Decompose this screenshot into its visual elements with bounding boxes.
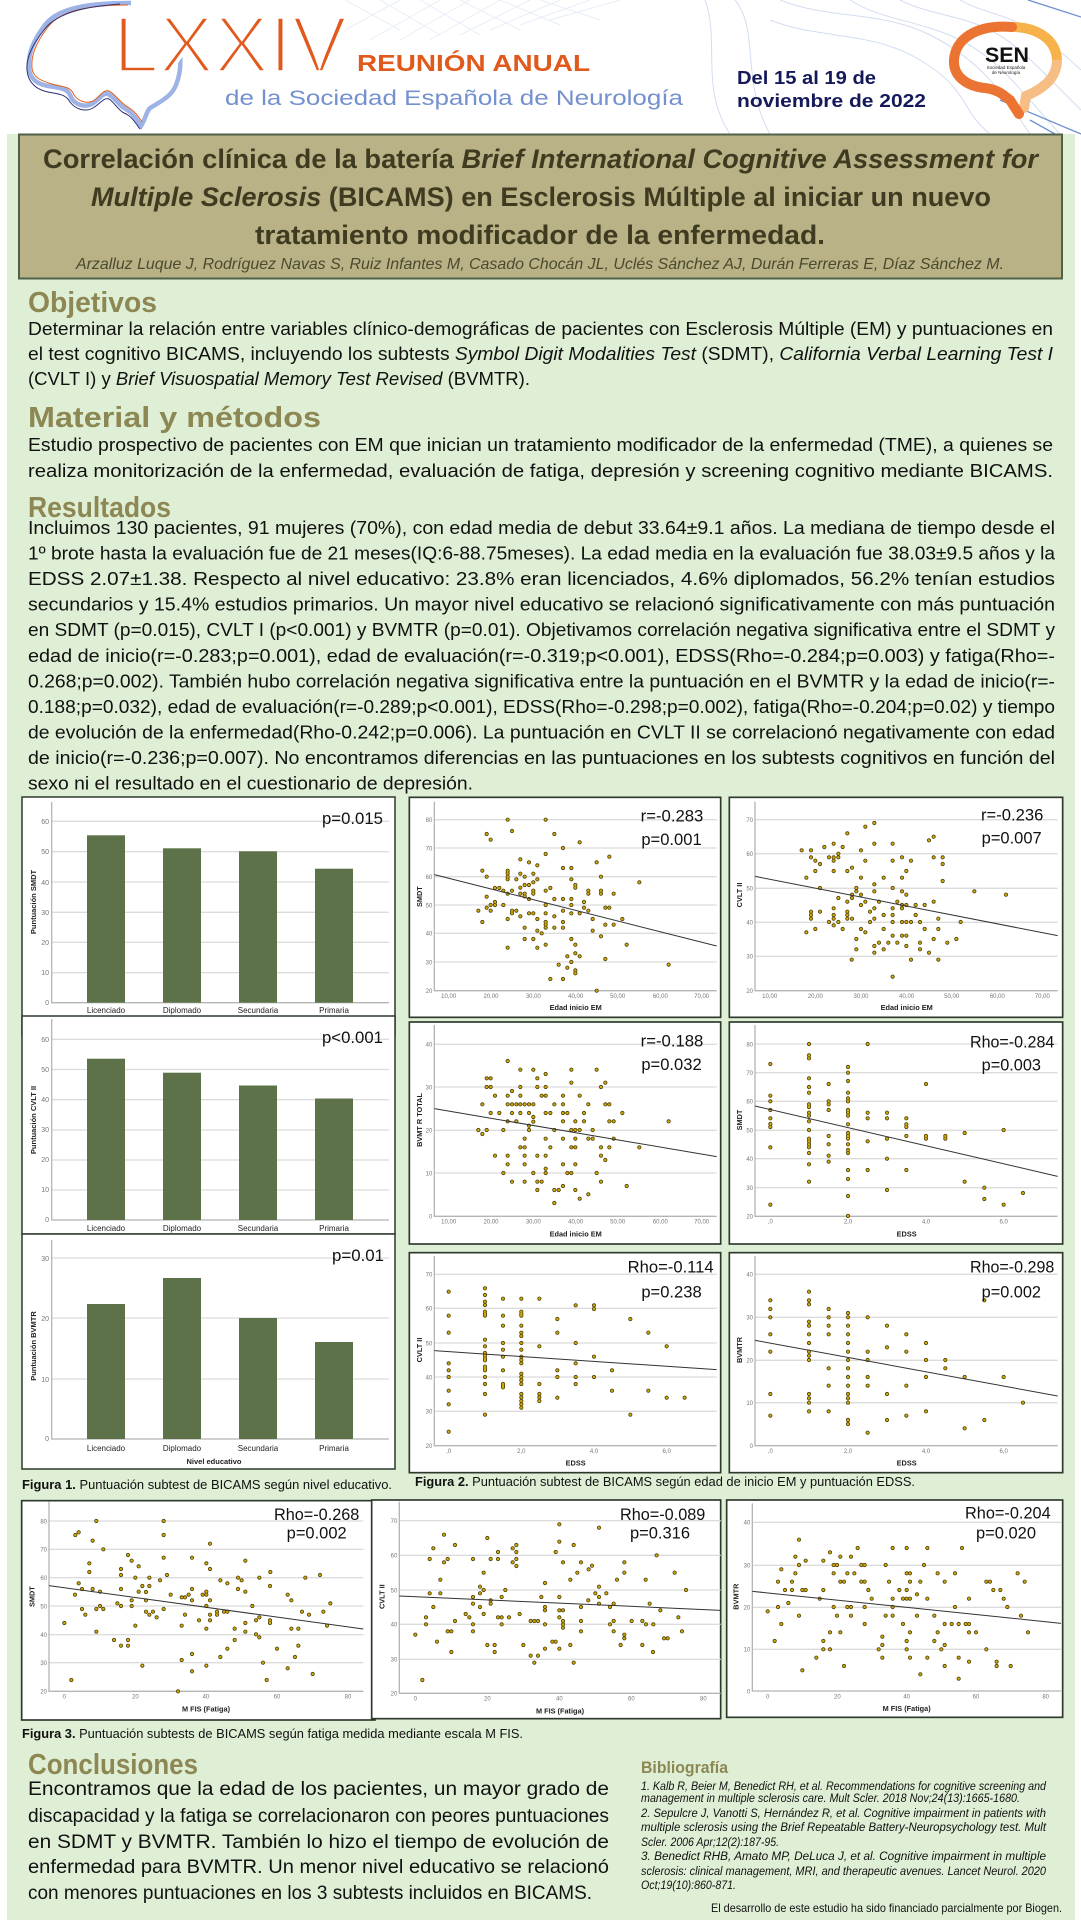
scatter: CVLT II vs EDSS: 70	[426, 1273, 433, 1279]
bar chart: BVMTR by education: Puntuación BVMTR	[29, 1311, 38, 1381]
scatter: CVLT II vs EDSS: 40	[426, 1375, 433, 1381]
scatter: BVMT R total vs age at onset: 0	[429, 1215, 433, 1221]
bar chart: SMDT by education: 30	[41, 910, 49, 917]
scatter: SMDT vs fatigue: 60	[274, 1695, 281, 1701]
bar chart: CVLT II by education: 30	[41, 1127, 49, 1134]
scatter: CVLT II vs age at onset: 50,00	[944, 994, 960, 1000]
scatter: CVLT II vs fatigue: 60	[628, 1697, 635, 1703]
scatter: BVMTR vs fatigue: M FIS (Fatiga)	[883, 1704, 931, 1713]
scatter: SMDT vs fatigue: 80	[345, 1695, 352, 1701]
scatter: CVLT II vs fatigue: 20	[484, 1697, 491, 1703]
scatter: CVLT II vs age at onset: p=0.007	[982, 828, 1042, 847]
scatter: SMDT vs fatigue: 50	[40, 1604, 48, 1610]
bar chart: BVMTR by education: Primaria	[319, 1444, 349, 1453]
bar chart: SMDT by education: 50	[41, 849, 49, 856]
scatter: SMDT vs age at onset: 50,00	[610, 994, 626, 1000]
scatter: CVLT II vs age at onset: 20,00	[808, 994, 823, 1000]
caption: figura 3: Figura 3. Puntuación subtests de BICAMS según fatiga medida mediante escala M FIS.	[22, 1726, 523, 1741]
scatter: CVLT II vs fatigue: p=0.316	[630, 1523, 690, 1542]
scatter: BVMTR vs EDSS: 4,0	[922, 1449, 931, 1455]
event dates: noviembre de 2022	[737, 91, 926, 111]
scatter: CVLT II vs age at onset: Edad inicio EM	[881, 1003, 933, 1012]
icon: SEN logo: de Neurología	[992, 70, 1021, 75]
section: resultados: Resultados	[28, 492, 171, 524]
scatter: CVLT II vs EDSS: EDSS	[566, 1459, 586, 1468]
scatter: SMDT vs age at onset: 20,00	[484, 994, 499, 1000]
scatter: SMDT vs fatigue: 70	[40, 1548, 48, 1554]
scatter: BVMTR vs fatigue: Rho=-0.204	[965, 1503, 1051, 1522]
section: resultados: Incluimos 130 pacientes, 91 mujeres (70%), con edad media de debut 33.64±9.1 años. La mediana de tiempo desde el	[28, 517, 1055, 538]
scatter: BVMTR vs fatigue: 20	[744, 1606, 751, 1612]
scatter: BVMTR vs EDSS: p=0.002	[982, 1282, 1041, 1301]
bar chart: SMDT by education: 0	[45, 1000, 49, 1007]
section: conclusiones: en SDMT y BVMTR. También lo hizo el tiempo de evolución de	[28, 1831, 609, 1853]
scatter: CVLT II vs EDSS: 20	[426, 1444, 433, 1450]
bar chart: SMDT by education: Diplomado	[163, 1006, 202, 1015]
scatter: SMDT vs age at onset: 70,00	[694, 994, 710, 1000]
scatter: SMDT vs age at onset: 30,00	[526, 994, 541, 1000]
bar chart: CVLT II by education	[22, 1016, 395, 1234]
section: objetivos: Objetivos	[28, 287, 157, 319]
bar chart: BVMTR by education: Licenciado	[87, 1444, 126, 1453]
bar chart: SMDT by education: 10	[41, 970, 49, 977]
section: conclusiones: Conclusiones	[28, 1749, 198, 1781]
title box: Arzalluz Luque J, Rodríguez Navas S, Ruiz Infantes M, Casado Chocán JL, Uclés Sánchez AJ, Durán Ferreras E, Díaz Sánchez M.	[75, 256, 1004, 273]
bar chart: CVLT II by education: 10	[41, 1187, 49, 1194]
scatter: SMDT vs age at onset: p=0.001	[641, 830, 702, 849]
scatter: CVLT II vs age at onset: 70,00	[1035, 994, 1050, 1000]
bar chart: BVMTR by education: Nivel educativo	[186, 1457, 242, 1466]
scatter: CVLT II vs age at onset: 60,00	[990, 994, 1005, 1000]
scatter: CVLT II vs age at onset: 20	[746, 989, 754, 995]
scatter: CVLT II vs EDSS: p=0.238	[641, 1282, 702, 1301]
scatter: CVLT II vs age at onset: 30	[746, 955, 754, 961]
scatter: BVMTR vs EDSS: 10	[746, 1401, 754, 1407]
scatter: SMDT vs EDSS: 4,0	[922, 1220, 931, 1226]
scatter: SMDT vs EDSS: ,0	[768, 1220, 773, 1226]
scatter: BVMT R total vs age at onset: r=-0.188	[641, 1032, 703, 1051]
section: resultados: edad de inicio(r=-0.283;p=0.001), edad de evaluación(r=-0.319;p<0.001), EDSS(Rho=-0.284;p=0.003) y fatiga(Rho=-	[28, 645, 1055, 666]
bar chart: CVLT II by education: 60	[41, 1037, 49, 1044]
scatter: CVLT II vs EDSS: 2,0	[517, 1449, 526, 1455]
bar chart: BVMTR by education: 20	[41, 1316, 49, 1323]
bar chart: CVLT II by education: Secundaria	[238, 1224, 279, 1233]
scatter: CVLT II vs EDSS: 50	[426, 1341, 433, 1347]
scatter: SMDT vs fatigue: 20	[40, 1690, 48, 1696]
scatter: CVLT II vs EDSS: 6,0	[662, 1449, 671, 1455]
bar chart: SMDT by education: 60	[41, 819, 49, 826]
section: resultados: en SDMT (p=0.015), CVLT I (p<0.001) y BVMTR (p=0.01). Objetivamos correlación negativa significativa entre el SDMT y	[28, 619, 1056, 640]
section: resultados: de inicio(r=-0.236;p=0.007). No encontramos diferencias en las puntuaciones en los subtests cognitivos en función del	[28, 747, 1055, 768]
scatter: BVMTR vs EDSS	[729, 1253, 1063, 1473]
section: bibliografía: multiple sclerosis using the Brief Repeatable Battery-Neuropsychology test. Mult	[641, 1822, 1047, 1834]
scatter: SMDT vs EDSS: 60	[746, 1100, 754, 1106]
scatter: SMDT vs age at onset: 10,00	[441, 994, 457, 1000]
title box	[19, 134, 1062, 278]
section: objetivos: el test cognitivo BICAMS, incluyendo los subtests Symbol Digit Modalities Test (SDMT), California Verbal Learning Test I	[28, 343, 1053, 364]
icon: SEN logo: Sociedad Española	[987, 65, 1026, 70]
icon: SEN logo	[954, 27, 1057, 114]
bar chart: BVMTR by education: 0	[45, 1436, 49, 1443]
bar chart: BVMTR by education: 30	[41, 1256, 49, 1263]
section: material y métodos: realiza monitorización de la enfermedad, evaluación de fatiga, depresión y screening cognitivo mediante BICAMS.	[28, 460, 1053, 481]
scatter: BVMTR vs fatigue: 60	[973, 1694, 980, 1700]
bar chart: BVMTR by education: p=0.01	[332, 1246, 384, 1265]
bar chart: SMDT by education: Licenciado	[87, 1006, 126, 1015]
bar chart: CVLT II by education: 40	[41, 1097, 49, 1104]
scatter: CVLT II vs fatigue: 0	[414, 1697, 418, 1703]
scatter: BVMTR vs EDSS: 0	[750, 1444, 754, 1450]
scatter: CVLT II vs age at onset: 40	[746, 921, 754, 927]
section: objetivos: Determinar la relación entre variables clínico-demográficas de pacientes con Esclerosis Múltiple (EM) y puntuaciones en	[28, 318, 1053, 339]
scatter: CVLT II vs age at onset: 10,00	[762, 994, 778, 1000]
scatter: BVMT R total vs age at onset: Edad inicio EM	[550, 1230, 602, 1239]
scatter: CVLT II vs age at onset	[729, 797, 1063, 1017]
scatter: BVMTR vs fatigue: 80	[1042, 1694, 1050, 1700]
scatter: BVMTR vs EDSS: ,0	[768, 1449, 773, 1455]
scatter: SMDT vs EDSS: Rho=-0.284	[970, 1032, 1054, 1051]
scatter: SMDT vs fatigue: 20	[132, 1695, 139, 1701]
section: conclusiones: Encontramos que la edad de los pacientes, un mayor grado de	[28, 1778, 609, 1800]
event title: REUNIÓN ANUAL	[357, 49, 590, 76]
scatter: BVMTR vs fatigue: BVMTR	[732, 1583, 741, 1610]
section: conclusiones: con menores puntuaciones en los 3 subtests incluidos en BICAMS.	[28, 1882, 592, 1904]
section: bibliografía: Oct;19(10):860-871.	[641, 1880, 736, 1892]
section: resultados: EDSS 2.07±1.38. Respecto al nivel educativo: 23.8% eran licenciados, 4.6% diplomados, 56.2% tenían estudios	[28, 568, 1055, 589]
scatter: CVLT II vs fatigue: 40	[556, 1697, 563, 1703]
scatter: CVLT II vs fatigue: M FIS (Fatiga)	[536, 1707, 585, 1716]
title box: Correlación clínica de la batería Brief International Cognitive Assessment for	[43, 144, 1039, 174]
scatter: SMDT vs fatigue	[22, 1501, 375, 1720]
scatter: SMDT vs fatigue: p=0.002	[287, 1523, 347, 1542]
scatter: BVMT R total vs age at onset: 10	[426, 1171, 433, 1177]
bar chart: BVMTR by education: Diplomado	[163, 1444, 202, 1453]
section: resultados: de evolución de la enfermedad(Rho-0.242;p=0.006). La puntuación en CVLT II se correlacionó negativamente con edad	[28, 721, 1055, 742]
section: bibliografía: 1. Kalb R, Beier M, Benedict RH, et al. Recommendations for cognitive screening and	[641, 1781, 1047, 1793]
section: material y métodos: Estudio prospectivo de pacientes con EM que inician un tratamiento modificador de la enfermedad (TME), a quienes se	[28, 434, 1053, 455]
bar chart: CVLT II by education: 20	[41, 1157, 49, 1164]
caption: figura 1: Figura 1. Puntuación subtest de BICAMS según nivel educativo.	[22, 1477, 392, 1492]
section: bibliografía: 3. Benedict RHB, Amato MP, DeLuca J, et al. Cognitive impairment in multiple	[641, 1851, 1046, 1863]
scatter: BVMT R total vs age at onset: p=0.032	[641, 1055, 702, 1074]
scatter: BVMT R total vs age at onset: 30	[426, 1085, 433, 1091]
bar chart: SMDT by education: p=0.015	[322, 809, 383, 828]
scatter: CVLT II vs fatigue	[372, 1500, 721, 1719]
scatter: CVLT II vs EDSS: CVLT II	[415, 1338, 424, 1362]
scatter: BVMT R total vs age at onset: 20,00	[484, 1220, 499, 1226]
scatter: CVLT II vs EDSS: 60	[426, 1307, 433, 1313]
scatter: CVLT II vs age at onset: 50	[746, 887, 754, 893]
scatter: BVMT R total vs age at onset: 50,00	[610, 1220, 626, 1226]
section: resultados: sexo ni el resultado en el cuestionario de depresión.	[28, 772, 473, 794]
scatter: SMDT vs EDSS: 40	[746, 1157, 754, 1163]
section: conclusiones: enfermedad para BVMTR. Un menor nivel educativo se relacionó	[28, 1856, 609, 1878]
scatter: BVMT R total vs age at onset: 40	[426, 1043, 433, 1049]
title box: Multiple Sclerosis (BICAMS) en Esclerosis Múltiple al iniciar un nuevo	[91, 182, 991, 212]
scatter: BVMTR vs EDSS: BVMTR	[735, 1336, 744, 1363]
section: conclusiones	[28, 1749, 609, 1904]
scatter: SMDT vs age at onset: 40	[426, 932, 433, 938]
scatter: CVLT II vs EDSS: 30	[426, 1410, 433, 1416]
scatter: SMDT vs EDSS: SMDT	[735, 1109, 744, 1130]
bar chart: CVLT II by education: 50	[41, 1067, 49, 1074]
scatter: BVMT R total vs age at onset: 10,00	[441, 1220, 457, 1226]
bar chart: SMDT by education: 20	[41, 940, 49, 947]
scatter: SMDT vs EDSS: EDSS	[897, 1230, 917, 1239]
scatter: BVMTR vs fatigue: 20	[834, 1694, 841, 1700]
scatter: SMDT vs EDSS	[729, 1022, 1063, 1244]
scatter: CVLT II vs fatigue: 70	[391, 1519, 398, 1525]
event number: LXXIV	[113, 0, 348, 89]
section: resultados: 0.188;p=0.032), edad de evaluación(r=-0.289;p<0.001), EDSS(Rho=-0.298;p=0.002), fatiga(Rho=-0.204;p=0.02) y tiempo	[28, 696, 1055, 717]
scatter: SMDT vs EDSS: 30	[746, 1186, 754, 1192]
scatter: BVMTR vs fatigue: 30	[744, 1564, 751, 1570]
scatter: BVMT R total vs age at onset: 30,00	[526, 1220, 541, 1226]
bar chart: SMDT by education: 40	[41, 880, 49, 887]
scatter: BVMTR vs EDSS: 30	[746, 1316, 754, 1322]
scatter: CVLT II vs fatigue: 80	[700, 1697, 707, 1703]
scatter: BVMTR vs fatigue: 40	[903, 1694, 911, 1700]
scatter: BVMTR vs fatigue: 40	[744, 1521, 751, 1527]
icon: brain outline	[27, 3, 180, 129]
section: resultados	[28, 492, 1056, 794]
icon: SEN logo: SEN	[985, 44, 1029, 67]
scatter: SMDT vs age at onset: 50	[426, 903, 433, 909]
bar chart: CVLT II by education: Puntuación CVLT II	[29, 1086, 38, 1154]
scatter: CVLT II vs EDSS: 4,0	[590, 1449, 599, 1455]
scatter: SMDT vs EDSS: 80	[746, 1042, 754, 1048]
scatter: SMDT vs EDSS: 50	[746, 1129, 754, 1135]
bar chart: CVLT II by education: Licenciado	[87, 1224, 126, 1233]
scatter: BVMTR vs fatigue: 0	[747, 1689, 751, 1695]
society name: de la Sociedad Española de Neurología	[225, 87, 683, 110]
scatter: CVLT II vs fatigue: Rho=-0.089	[620, 1505, 705, 1524]
scatter: BVMTR vs fatigue	[727, 1500, 1063, 1717]
bar chart: SMDT by education: Puntuación SMDT	[29, 870, 38, 934]
scatter: SMDT vs age at onset: 80	[426, 818, 433, 824]
scatter: BVMT R total vs age at onset: 60,00	[653, 1220, 668, 1226]
scatter: BVMTR vs EDSS: 40	[746, 1273, 754, 1279]
scatter: BVMT R total vs age at onset: 20	[426, 1129, 433, 1135]
scatter: SMDT vs age at onset: r=-0.283	[641, 807, 703, 826]
scatter: CVLT II vs age at onset: 60	[746, 852, 754, 858]
scatter: SMDT vs fatigue: Rho=-0.268	[274, 1505, 359, 1524]
scatter: CVLT II vs fatigue: CVLT II	[378, 1584, 387, 1609]
scatter: SMDT vs fatigue: 40	[40, 1633, 48, 1639]
bar chart: CVLT II by education: Diplomado	[163, 1224, 202, 1233]
header banner	[0, 0, 1081, 134]
section: material y métodos	[28, 402, 1053, 481]
scatter: SMDT vs age at onset: 60,00	[653, 994, 668, 1000]
title box: tratamiento modificador de la enfermedad.	[255, 220, 825, 250]
scatter: SMDT vs fatigue: 0	[63, 1695, 67, 1701]
scatter: SMDT vs EDSS: 20	[746, 1215, 754, 1221]
section: bibliografía	[640, 1758, 1047, 1892]
scatter: BVMTR vs EDSS: Rho=-0.298	[970, 1257, 1054, 1276]
bar chart: CVLT II by education: p<0.001	[322, 1028, 383, 1047]
section: bibliografía: 2. Sepulcre J, Vanotti S, Hernández R, et al. Cognitive impairment in patients with	[640, 1808, 1046, 1820]
scatter: SMDT vs age at onset: 20	[426, 989, 433, 995]
section: material y métodos: Material y métodos	[28, 402, 321, 434]
section: bibliografía: Scler. 2006 Apr;12(2):187-95.	[641, 1837, 779, 1849]
scatter: CVLT II vs fatigue: 30	[391, 1658, 398, 1664]
scatter: BVMTR vs fatigue: p=0.020	[976, 1523, 1036, 1542]
event dates: Del 15 al 19 de	[737, 68, 876, 88]
scatter: SMDT vs EDSS: 2,0	[844, 1220, 853, 1226]
scatter: BVMT R total vs age at onset: 70,00	[694, 1220, 710, 1226]
section: bibliografía: management in multiple sclerosis care. Mult Scler. 2018 Nov;24(13):1665-1680.	[641, 1793, 1020, 1805]
scatter: SMDT vs age at onset: 30	[426, 960, 433, 966]
scatter: BVMT R total vs age at onset: BVMT R TOTAL	[415, 1093, 424, 1147]
scatter: CVLT II vs age at onset: CVLT II	[735, 883, 744, 907]
section: bibliografía: Bibliografía	[641, 1758, 729, 1777]
scatter: BVMTR vs EDSS: 20	[746, 1359, 754, 1365]
scatter: SMDT vs fatigue: 30	[40, 1661, 48, 1667]
scatter: SMDT vs age at onset: 60	[426, 875, 433, 881]
scatter: SMDT vs age at onset: SMDT	[415, 886, 424, 907]
scatter: CVLT II vs EDSS: Rho=-0.114	[628, 1257, 714, 1276]
scatter: CVLT II vs fatigue: 60	[391, 1554, 398, 1560]
scatter: CVLT II vs age at onset: 40,00	[899, 994, 915, 1000]
bar chart: BVMTR by education	[22, 1234, 395, 1469]
section: objetivos	[28, 287, 1053, 389]
scatter: CVLT II vs age at onset: r=-0.236	[981, 806, 1043, 825]
caption: figura 2: Figura 2. Puntuación subtest de BICAMS según edad de inicio EM y puntuación EDSS.	[415, 1474, 915, 1489]
scatter: SMDT vs fatigue: 80	[40, 1519, 48, 1525]
scatter: SMDT vs EDSS: 70	[746, 1071, 754, 1077]
scatter: SMDT vs fatigue: 40	[203, 1695, 210, 1701]
scatter: SMDT vs EDSS: p=0.003	[982, 1056, 1041, 1075]
bar chart: CVLT II by education: 0	[45, 1217, 49, 1224]
scatter: BVMT R total vs age at onset: 40,00	[568, 1220, 584, 1226]
bar chart: SMDT by education: Primaria	[319, 1006, 349, 1015]
scatter: BVMTR vs fatigue: 0	[766, 1694, 770, 1700]
scatter: CVLT II vs EDSS	[409, 1253, 721, 1473]
bar chart: BVMTR by education: Secundaria	[238, 1444, 279, 1453]
section: resultados: 0.268;p=0.002). También hubo correlación negativa significativa entre la puntuación en el BVMTR y la edad de inicio(r=-	[28, 670, 1055, 691]
scatter: SMDT vs fatigue: 60	[40, 1576, 48, 1582]
scatter: BVMTR vs fatigue: 10	[744, 1648, 751, 1654]
section: objetivos: (CVLT I) y Brief Visuospatial Memory Test Revised (BVMTR).	[28, 368, 530, 389]
bar chart: BVMTR by education: 10	[41, 1377, 49, 1384]
bar chart: SMDT by education: Secundaria	[238, 1006, 279, 1015]
bar chart: SMDT by education	[22, 797, 395, 1036]
scatter: CVLT II vs age at onset: 30,00	[854, 994, 869, 1000]
scatter: BVMTR vs EDSS: 2,0	[844, 1449, 853, 1455]
scatter: SMDT vs age at onset	[409, 797, 721, 1017]
scatter: SMDT vs age at onset: 40,00	[568, 994, 584, 1000]
section: resultados: secundarios y 15.4% estudios primarios. Un mayor nivel educativo se relacionó significativamente con más puntuación	[28, 594, 1055, 615]
section: resultados: 1º brote hasta la evaluación fue de 21 meses(IQ:6-88.75meses). La edad media en la evaluación fue 38.03±9.5 años y la	[28, 543, 1056, 564]
scatter: BVMTR vs EDSS: 6,0	[999, 1449, 1008, 1455]
section: bibliografía: sclerosis: clinical management, MRI, and therapeutic avenues. Lancet Neurol. 2020	[641, 1866, 1047, 1878]
scatter: CVLT II vs age at onset: 70	[746, 818, 754, 824]
event dates	[737, 68, 926, 111]
scatter: CVLT II vs fatigue: 50	[391, 1588, 398, 1594]
scatter: SMDT vs fatigue: M FIS (Fatiga)	[182, 1704, 231, 1713]
section: conclusiones: discapacidad y la fatiga se correlacionaron con peores puntuaciones	[28, 1805, 609, 1827]
scatter: SMDT vs age at onset: 70	[426, 846, 433, 852]
scatter: SMDT vs EDSS: 6,0	[999, 1220, 1008, 1226]
scatter: CVLT II vs fatigue: 20	[391, 1692, 398, 1698]
scatter: BVMTR vs EDSS: EDSS	[897, 1459, 917, 1468]
bar chart: CVLT II by education: Primaria	[319, 1224, 349, 1233]
scatter: CVLT II vs EDSS: ,0	[446, 1449, 452, 1455]
scatter: BVMT R total vs age at onset	[409, 1022, 721, 1244]
scatter: CVLT II vs fatigue: 40	[391, 1623, 398, 1629]
scatter: SMDT vs fatigue: SMDT	[28, 1586, 37, 1607]
scatter: SMDT vs age at onset: Edad inicio EM	[550, 1003, 602, 1012]
